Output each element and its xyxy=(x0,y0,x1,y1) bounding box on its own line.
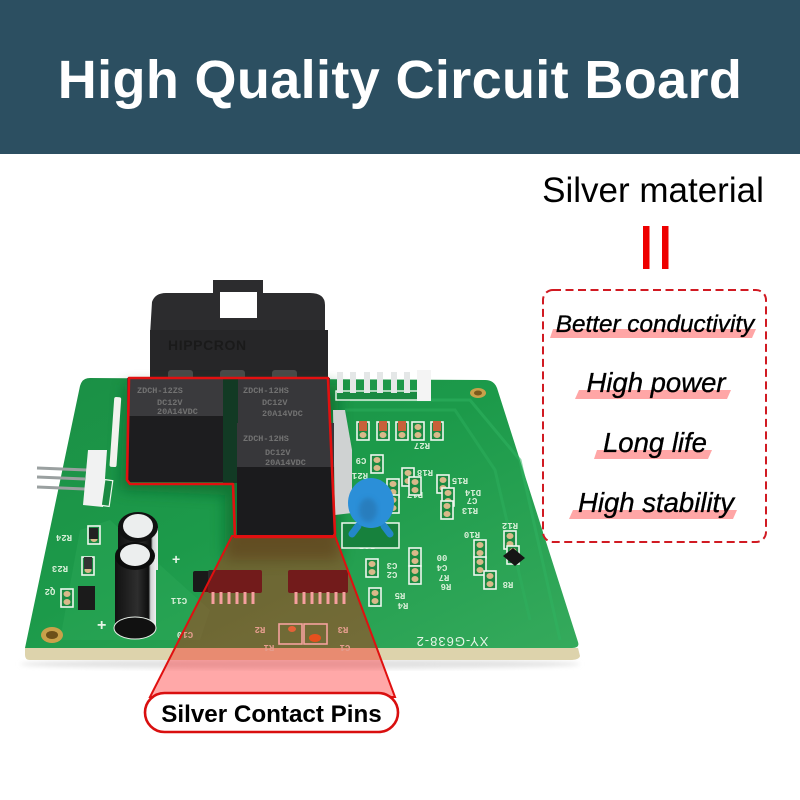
header banner xyxy=(0,0,800,154)
icon: relays: DC12V xyxy=(262,398,288,408)
silkscreen labels: R6 xyxy=(441,581,451,591)
icon: relays: ZDCH-12HS xyxy=(243,386,289,396)
relay red outline xyxy=(127,378,335,537)
silkscreen labels: R24 xyxy=(55,532,72,542)
silkscreen labels xyxy=(45,440,518,649)
icon: relays: DC12V xyxy=(265,448,291,458)
silkscreen labels: C7 xyxy=(467,495,477,505)
icon: white side socket xyxy=(333,410,352,515)
icon: IC chips xyxy=(193,570,348,604)
icon: mounting holes xyxy=(41,388,486,643)
silkscreen labels: XY-G638-2 xyxy=(416,634,488,649)
silkscreen labels: C9 xyxy=(356,455,366,465)
silkscreen labels: R18 xyxy=(417,467,433,477)
icon: black connector: HIPPCRON xyxy=(168,337,247,353)
icon: left white connector xyxy=(37,397,121,507)
title: High Quality Circuit Board xyxy=(58,50,742,110)
silkscreen labels: R7 xyxy=(439,572,449,582)
silkscreen labels: Q2 xyxy=(45,586,55,596)
circuit board photo xyxy=(20,280,580,697)
icon: relays: 20A14VDC xyxy=(157,407,198,417)
silkscreen labels: R8 xyxy=(503,579,513,589)
silkscreen labels: + xyxy=(172,551,180,567)
icon: SMD pads R1 R2 R3 C1: R2 xyxy=(255,624,265,634)
icon: Q2 transistor xyxy=(78,586,95,610)
icon: orange SMD row xyxy=(357,421,443,440)
icon: SMD pads R1 R2 R3 C1: R1 xyxy=(263,642,274,652)
icon: front capacitor xyxy=(114,542,156,639)
benefit: High stability: High stability xyxy=(578,487,736,518)
icon: blue varistor xyxy=(342,478,399,548)
silkscreen labels: D14 xyxy=(464,487,481,497)
icon: rear capacitor xyxy=(118,512,158,570)
callout: red zoom cone xyxy=(150,536,395,697)
benefit: Better conductivity: Better conductivity xyxy=(556,311,756,338)
silkscreen labels: R23 xyxy=(52,563,68,573)
pcb body xyxy=(25,378,580,660)
silkscreen labels: 00 xyxy=(437,552,447,562)
silkscreen labels: + xyxy=(97,617,106,634)
silkscreen labels: C3 xyxy=(387,560,397,570)
heading: Silver material: Silver material xyxy=(542,171,764,210)
panel: silver benefits xyxy=(543,290,766,542)
icon: relays: ZDCH-12HS xyxy=(243,434,289,444)
icon: relays: 20A14VDC xyxy=(265,458,306,468)
icon: SMD pads R1 R2 R3 C1: R3 xyxy=(338,624,348,634)
silkscreen labels: C11 xyxy=(170,595,187,605)
benefit: Long life: Long life xyxy=(603,427,707,458)
silkscreen labels: C4 xyxy=(436,562,447,572)
benefit: High power: High power xyxy=(586,367,727,398)
silkscreen labels: C10 xyxy=(177,629,193,639)
silkscreen labels: R21 xyxy=(351,470,368,480)
icon: relays xyxy=(127,378,334,536)
icon: SMD pads cluster xyxy=(61,455,525,607)
icon: relays: 20A14VDC xyxy=(262,409,303,419)
silkscreen labels: R12 xyxy=(502,520,518,530)
icon: red equals bars xyxy=(643,226,668,269)
silkscreen labels: R25 xyxy=(359,540,375,550)
silkscreen labels: R13 xyxy=(462,505,478,515)
silkscreen labels: C2 xyxy=(387,569,397,579)
icon: black connector xyxy=(150,280,328,385)
icon: SMD pads R1 R2 R3 C1: C1 xyxy=(339,642,350,652)
silkscreen labels: R10 xyxy=(464,529,480,539)
icon: relays: ZDCH-12ZS xyxy=(137,386,183,396)
icon: relays: DC12V xyxy=(157,398,183,408)
silkscreen labels: R27 xyxy=(414,440,430,450)
callout: Silver Contact Pins xyxy=(145,693,398,732)
silkscreen labels: R17 xyxy=(407,489,423,499)
callout: Silver Contact Pins: Silver Contact Pins xyxy=(161,701,382,728)
silkscreen labels: R15 xyxy=(452,475,468,485)
icon: top white header xyxy=(336,370,431,401)
silkscreen labels: R4 xyxy=(397,600,408,610)
silkscreen labels: R5 xyxy=(395,590,405,600)
icon: SMD pads R1 R2 R3 C1 xyxy=(255,624,350,652)
